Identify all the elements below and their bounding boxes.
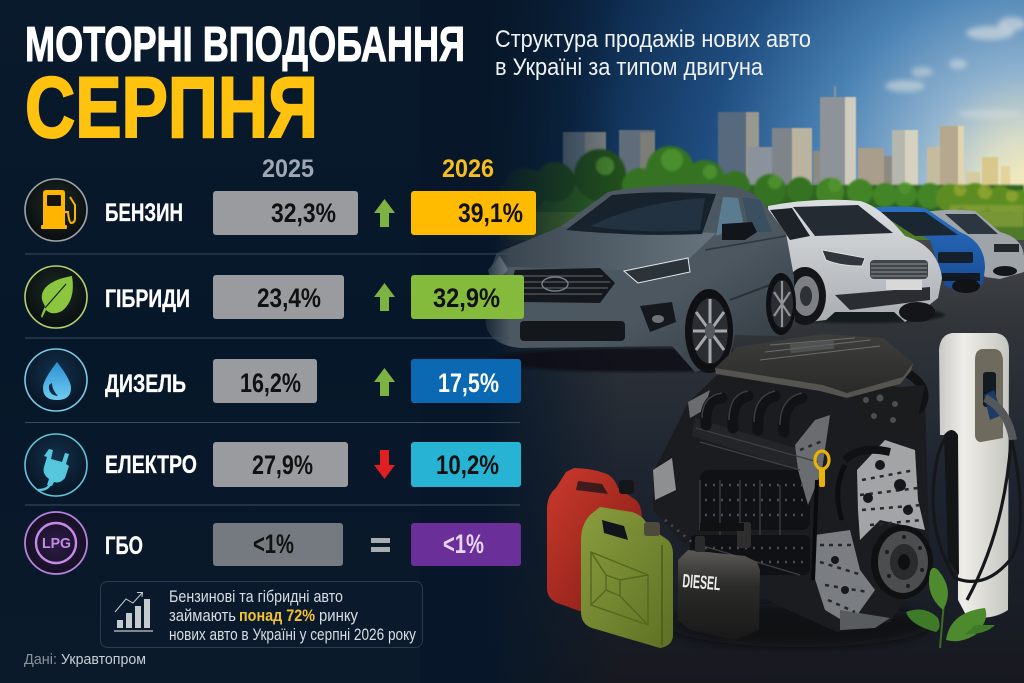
scene left fade (420, 0, 620, 683)
sky (420, 0, 1024, 260)
subtitle: Структура продажів нових авто (495, 26, 811, 53)
arrow up (374, 283, 395, 311)
photo scene: cars, engine, charger (420, 0, 1024, 683)
source note: Укравтопром (61, 651, 146, 668)
heading line 2: СЕРПНЯ (25, 60, 318, 156)
callout text: ринку (319, 606, 358, 625)
black diesel can (678, 522, 760, 640)
row: diesel (25, 349, 521, 411)
skyline buildings (563, 86, 1010, 191)
engine: intake runners (706, 396, 802, 432)
callout text: займають (169, 606, 236, 625)
bar 2026 (411, 359, 521, 403)
row dividers (25, 254, 520, 505)
value 2026: <1% (443, 529, 484, 559)
bar 2025 (213, 191, 358, 235)
source note (24, 651, 146, 668)
arrow up (374, 368, 395, 396)
callout (100, 582, 422, 648)
value 2025: 16,2% (240, 368, 301, 398)
equals sign (371, 538, 390, 552)
icon: LPG (25, 512, 87, 574)
row: petrol (25, 179, 536, 241)
column header 2025: 2025 (262, 155, 314, 183)
label: ГІБРИДИ (105, 285, 190, 313)
engine: top cover (715, 334, 913, 393)
value 2026: 10,2% (436, 450, 499, 480)
bar 2026 (411, 191, 536, 235)
icon: LPG: LPG (42, 535, 71, 552)
bar 2025 (213, 523, 343, 566)
value 2026: 17,5% (438, 368, 499, 398)
wheel: front (685, 289, 733, 373)
car: blue (868, 206, 985, 293)
value 2026: 39,1% (458, 198, 523, 228)
bar 2026 (411, 442, 521, 487)
value 2026: 32,9% (433, 283, 500, 313)
arrow up (374, 199, 395, 227)
icon: leaf (25, 266, 87, 328)
label: БЕНЗИН (105, 199, 183, 227)
engine: yellow dipstick (815, 451, 829, 469)
engine: body with castings (653, 372, 930, 632)
red jerry can (547, 468, 642, 613)
icon: rising bar chart (114, 592, 153, 631)
value 2025: 27,9% (252, 450, 313, 480)
bar 2025 (213, 359, 317, 403)
heading line 1: МОТОРНІ ВПОДОБАННЯ (25, 18, 465, 72)
value 2025: <1% (253, 529, 294, 559)
car: white (768, 200, 945, 325)
label: ЕЛЕКТРО (105, 451, 197, 479)
bar 2026 (411, 275, 524, 319)
callout text: Бензинові та гібридні авто (169, 587, 343, 606)
label: ГБО (105, 532, 143, 560)
column header 2026: 2026 (442, 155, 494, 183)
callout text: понад 72% (239, 606, 315, 625)
tree line (500, 146, 1024, 216)
clouds (885, 17, 1024, 119)
asphalt (420, 240, 1024, 683)
car: silver (925, 210, 1024, 279)
bar 2025 (213, 275, 344, 319)
green plant (906, 568, 995, 648)
grass strip (500, 212, 1024, 242)
bar 2026 (411, 523, 521, 566)
subtitle: в Україні за типом двигуна (495, 54, 764, 81)
charging station (933, 333, 1021, 618)
engine: casting details (800, 440, 922, 612)
subtitle (495, 26, 811, 81)
green jerry can (581, 507, 673, 648)
callout text: нових авто в Україні у серпні 2026 року (169, 625, 416, 644)
icon: plug (25, 434, 87, 496)
row: LPG (25, 512, 521, 574)
callout text (169, 587, 416, 644)
label: ДИЗЕЛЬ (105, 370, 186, 398)
label: DIESEL: DIESEL (682, 571, 721, 595)
wheel: rear (766, 273, 796, 335)
icon: fuel pump (25, 179, 87, 241)
value 2025: 32,3% (271, 198, 336, 228)
row: electric (25, 434, 521, 496)
car: grey SUV (485, 184, 796, 373)
row: hybrids (25, 266, 524, 328)
engine: flywheel (871, 525, 933, 599)
arrow down (374, 450, 395, 479)
value 2025: 23,4% (257, 283, 321, 313)
engine (653, 334, 933, 647)
bar 2025 (213, 442, 348, 487)
car left fade (480, 180, 510, 360)
title (25, 18, 465, 156)
source note: Дані: (24, 651, 57, 668)
engine: hoses right (895, 372, 924, 414)
icon: drop (25, 349, 87, 411)
